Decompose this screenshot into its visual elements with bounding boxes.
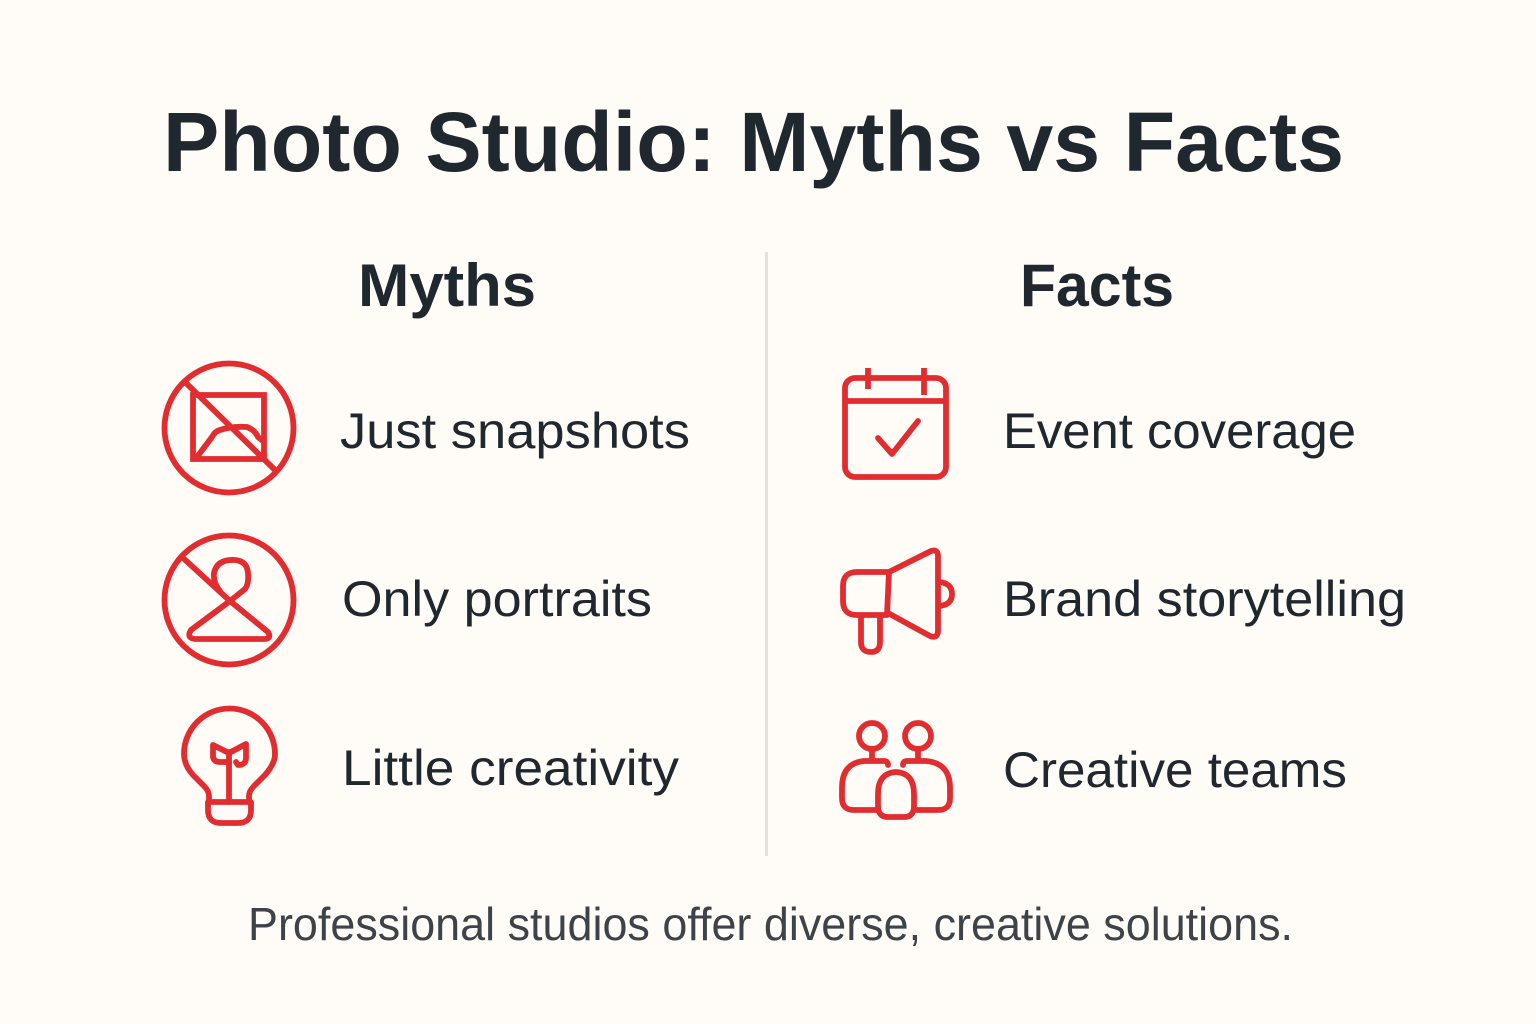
panel: myths list xyxy=(164,364,690,823)
icon: crossed-out photo xyxy=(164,364,294,492)
icon: megaphone xyxy=(843,551,952,652)
column heading: facts: Facts xyxy=(1020,252,1174,319)
column heading: myths: Myths xyxy=(358,252,536,319)
icon: team of people xyxy=(842,723,950,817)
icon: light bulb with sprout xyxy=(184,708,275,823)
fact: creative teams: Creative teams xyxy=(1003,742,1347,798)
title: Photo Studio: Myths vs Facts xyxy=(163,95,1344,189)
icon: crossed-out person xyxy=(164,536,294,664)
panel: facts list xyxy=(842,368,1406,817)
myth: just snapshots: Just snapshots xyxy=(340,403,690,459)
fact: event coverage: Event coverage xyxy=(1003,403,1356,459)
icon: calendar with check xyxy=(845,368,946,477)
myth: only portraits: Only portraits xyxy=(342,571,652,627)
fact: brand storytelling: Brand storytelling xyxy=(1003,571,1406,627)
myth: little creativity: Little creativity xyxy=(342,740,679,796)
closing statement: Professional studios offer diverse, creative solutions. xyxy=(248,898,1293,950)
